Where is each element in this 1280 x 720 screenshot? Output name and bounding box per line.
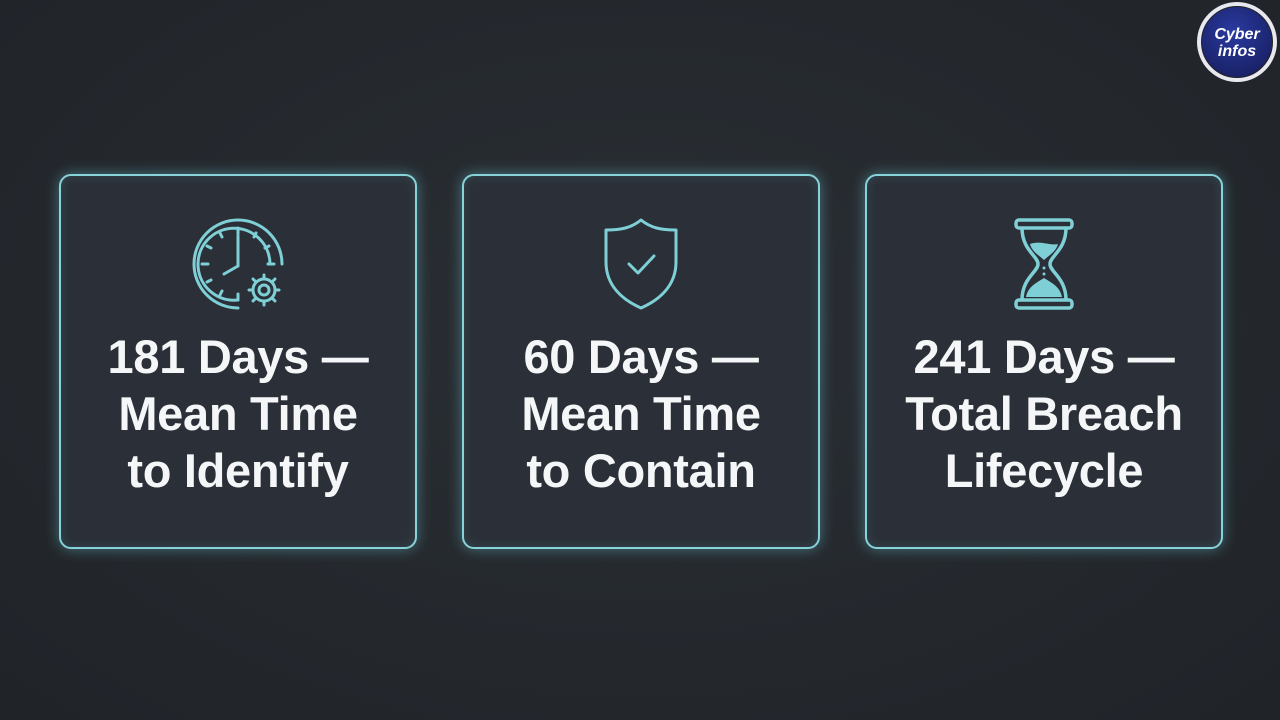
text: 60 days: Mean Time xyxy=(521,387,761,440)
logo badge xyxy=(1197,2,1277,82)
text: 241 days: Total Breach xyxy=(905,387,1183,440)
text: 241 days: Lifecycle xyxy=(945,444,1143,497)
text: 181 days xyxy=(108,330,369,497)
logo badge: Cyber xyxy=(1214,26,1260,43)
panel: mean time to identify xyxy=(59,174,417,549)
text: 60 days: 60 Days — xyxy=(523,330,759,383)
icon: hourglass xyxy=(1014,218,1074,310)
icon: clock with gear xyxy=(192,218,284,310)
text: 241 days xyxy=(905,330,1183,497)
text: 181 days: to Identify xyxy=(127,444,349,497)
text: 181 days: Mean Time xyxy=(118,387,358,440)
text: 241 days: 241 Days — xyxy=(914,330,1174,383)
panel: mean time to contain xyxy=(462,174,820,549)
text: 60 days: to Contain xyxy=(526,444,756,497)
logo badge: infos xyxy=(1218,43,1256,60)
panel: total breach lifecycle xyxy=(865,174,1223,549)
text: 181 days: 181 Days — xyxy=(108,330,368,383)
icon: shield check xyxy=(604,218,678,310)
text: 60 days xyxy=(521,330,761,497)
